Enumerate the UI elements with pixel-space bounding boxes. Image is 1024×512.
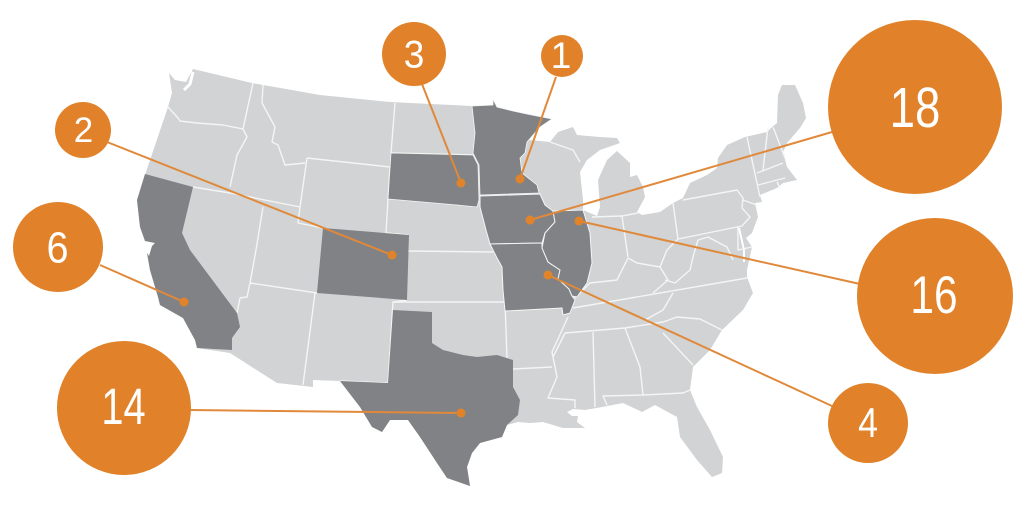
callout: 1 bbox=[516, 35, 583, 184]
callout: 3 bbox=[382, 22, 466, 188]
state: Minnesota bbox=[472, 99, 552, 195]
water: Chesapeake Bay bbox=[739, 228, 744, 262]
callout: 16 bbox=[574, 216, 1013, 374]
callout: 6: 6 bbox=[46, 223, 69, 272]
callout: 14: 14 bbox=[101, 378, 146, 435]
water: Puget Sound bbox=[184, 72, 193, 90]
state borders bbox=[168, 83, 785, 408]
callout: 6 bbox=[13, 202, 188, 306]
state: Colorado bbox=[317, 228, 409, 300]
state: South Dakota bbox=[388, 153, 479, 207]
land: contiguous states bbox=[137, 69, 806, 486]
callout: 1: 1 bbox=[551, 35, 571, 76]
state: Illinois bbox=[542, 210, 592, 297]
state: Iowa bbox=[480, 194, 555, 244]
callout: 18: 18 bbox=[890, 75, 940, 139]
map: United States bbox=[137, 69, 806, 486]
callout: 14 bbox=[57, 341, 466, 475]
callout: 2: 2 bbox=[74, 111, 93, 150]
state: Texas bbox=[340, 310, 520, 486]
water: Long Island Sound bbox=[758, 199, 774, 206]
callout: 4 bbox=[544, 270, 908, 463]
callout: 16: 16 bbox=[910, 267, 958, 325]
callout: 4: 4 bbox=[858, 400, 878, 447]
callout: 18 bbox=[526, 20, 1002, 224]
callout: 2 bbox=[55, 102, 396, 260]
callout: 3: 3 bbox=[404, 34, 424, 77]
state: Missouri bbox=[490, 243, 575, 315]
state: California bbox=[137, 174, 240, 350]
